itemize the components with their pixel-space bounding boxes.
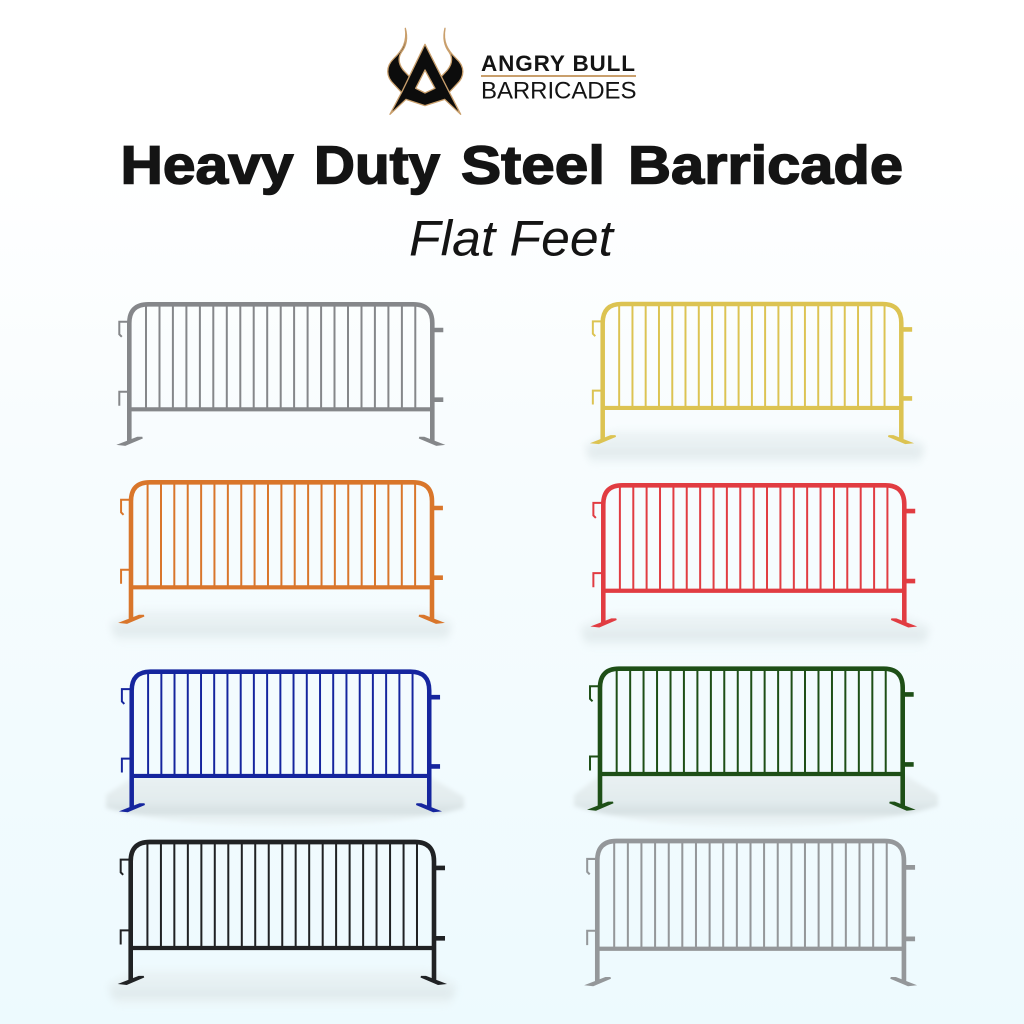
- title: Duty: [314, 136, 440, 196]
- barricade: black: [108, 842, 457, 1006]
- barricade: green: [574, 669, 938, 827]
- title: [120, 136, 903, 196]
- floor shadow: [580, 614, 930, 647]
- subtitle: Flat Feet: [409, 210, 615, 266]
- floor shadow: [106, 777, 464, 826]
- floor shadow: [574, 775, 938, 827]
- barricade: galvanized silver: [584, 841, 917, 986]
- logo: Angry Bull Barricades: [388, 28, 636, 114]
- icon: bull horns and letter A: [388, 28, 463, 114]
- logo text: Angry Bull: ANGRY BULL: [481, 51, 635, 76]
- title: Heavy: [120, 136, 294, 196]
- title: Steel: [461, 136, 605, 196]
- floor shadow: [585, 431, 925, 464]
- barricade: galvanized gray, top left: [116, 304, 445, 446]
- logo text: Barricades: BARRICADES: [481, 77, 636, 104]
- barricade: yellow: [585, 304, 925, 464]
- floor shadow: [110, 610, 452, 642]
- barricade: orange: [110, 482, 452, 642]
- barricade: blue: [106, 672, 464, 826]
- floor shadow: [108, 970, 457, 1006]
- title: Barricade: [628, 136, 903, 196]
- logo divider: [481, 75, 636, 77]
- barricade: red: [580, 485, 930, 647]
